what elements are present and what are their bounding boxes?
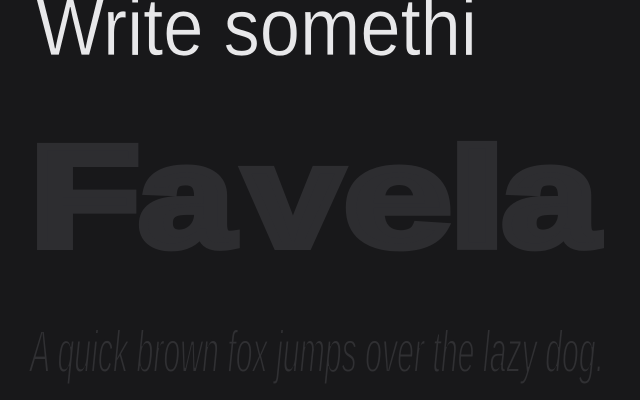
heavy wordmark: Favela: a — [502, 116, 600, 277]
heavy wordmark: Favela — [30, 115, 600, 277]
heavy wordmark: Favela: a — [139, 116, 236, 277]
heavy wordmark: Favela: F — [30, 115, 140, 277]
heavy wordmark: Favela: v — [244, 117, 343, 277]
heavy wordmark: Favela: l — [448, 120, 506, 276]
heavy wordmark: Favela: e — [344, 116, 452, 277]
